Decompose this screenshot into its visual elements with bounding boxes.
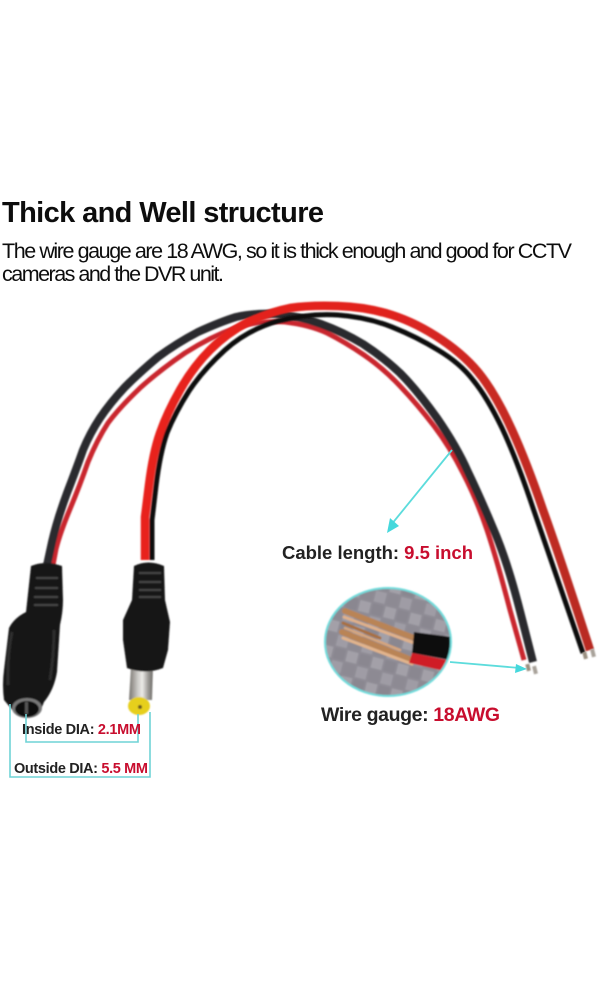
wire ends: stripped pins [525,649,596,674]
wire pair: male connector cable [145,306,590,653]
inset: stripped wire close-up [325,588,452,696]
label: cable length: Cable length: 9.5 inch [282,542,473,563]
arrow: cable length [387,450,452,533]
outside diameter bracket [10,704,150,777]
wire pair: female connector cable [47,314,533,662]
description text: cameras and the DVR unit. [2,262,224,286]
female DC connector [3,563,63,718]
arrow: wire gauge [450,662,527,673]
inside diameter bracket [26,714,138,742]
male DC connector [123,562,170,715]
label: outside diameter: Outside DIA: 5.5 MM [14,761,148,777]
title: Thick and Well structure [2,197,324,229]
copper strands [342,611,414,664]
description text: The wire gauge are 18 AWG, so it is thick enough and good for CCTV [2,239,573,263]
description text [2,239,573,286]
label: wire gauge: Wire gauge: 18AWG [321,704,500,726]
label: inside diameter: Inside DIA: 2.1MM [22,722,141,738]
